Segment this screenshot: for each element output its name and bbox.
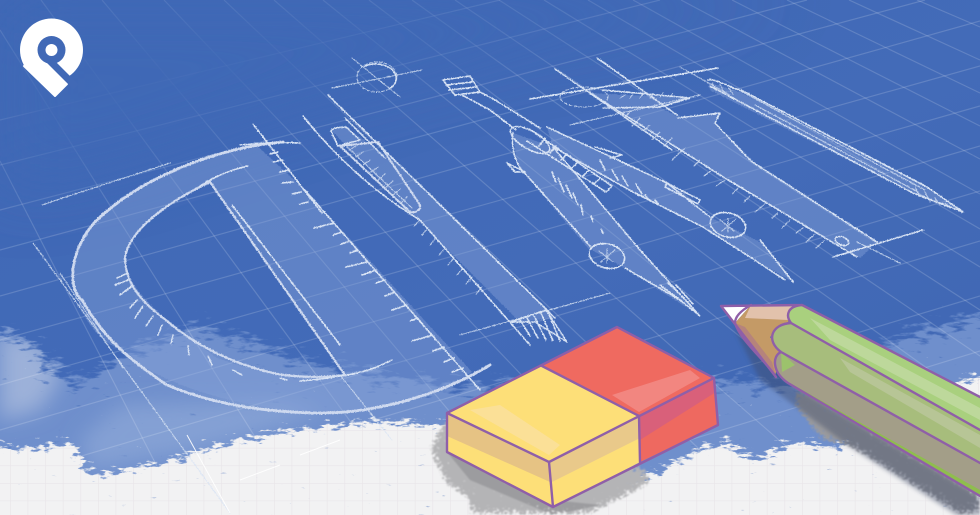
dark tint of pencil shadow on blue paint xyxy=(733,326,980,515)
eraser yellow front side xyxy=(447,413,553,507)
faint sketch lines on paper xyxy=(187,435,340,513)
eraser yellow right side xyxy=(549,416,640,507)
pencil upper facet xyxy=(788,305,980,430)
protractor inner scale ticks xyxy=(115,273,287,380)
pencil middle facet xyxy=(772,323,980,463)
logo: white map pin with letter P xyxy=(20,18,83,96)
sketch: sliding ruler and set square xyxy=(530,58,923,263)
sketch: crosshair circle xyxy=(332,58,422,97)
ruler tick marks xyxy=(270,152,463,372)
eraser red top face xyxy=(542,327,714,416)
pencil lead tip xyxy=(721,305,751,323)
eraser red side xyxy=(639,378,718,462)
sketch: pencil on blueprint xyxy=(680,67,963,212)
coloured pencil xyxy=(721,305,980,496)
sketch: compass xyxy=(443,76,793,316)
eraser and pencil cast shadows xyxy=(428,385,980,515)
light blue brushed paint layer xyxy=(0,306,980,486)
eraser xyxy=(447,327,718,507)
pencil lower facet xyxy=(775,352,980,496)
sketch: protractor and ruler xyxy=(33,124,490,513)
sketch: mechanical pen xyxy=(303,95,610,345)
eraser yellow top face xyxy=(447,366,639,462)
pen tip hatching xyxy=(460,293,610,342)
pencil outline xyxy=(721,305,980,496)
pencil wood xyxy=(735,305,802,376)
eraser outline xyxy=(447,327,718,507)
